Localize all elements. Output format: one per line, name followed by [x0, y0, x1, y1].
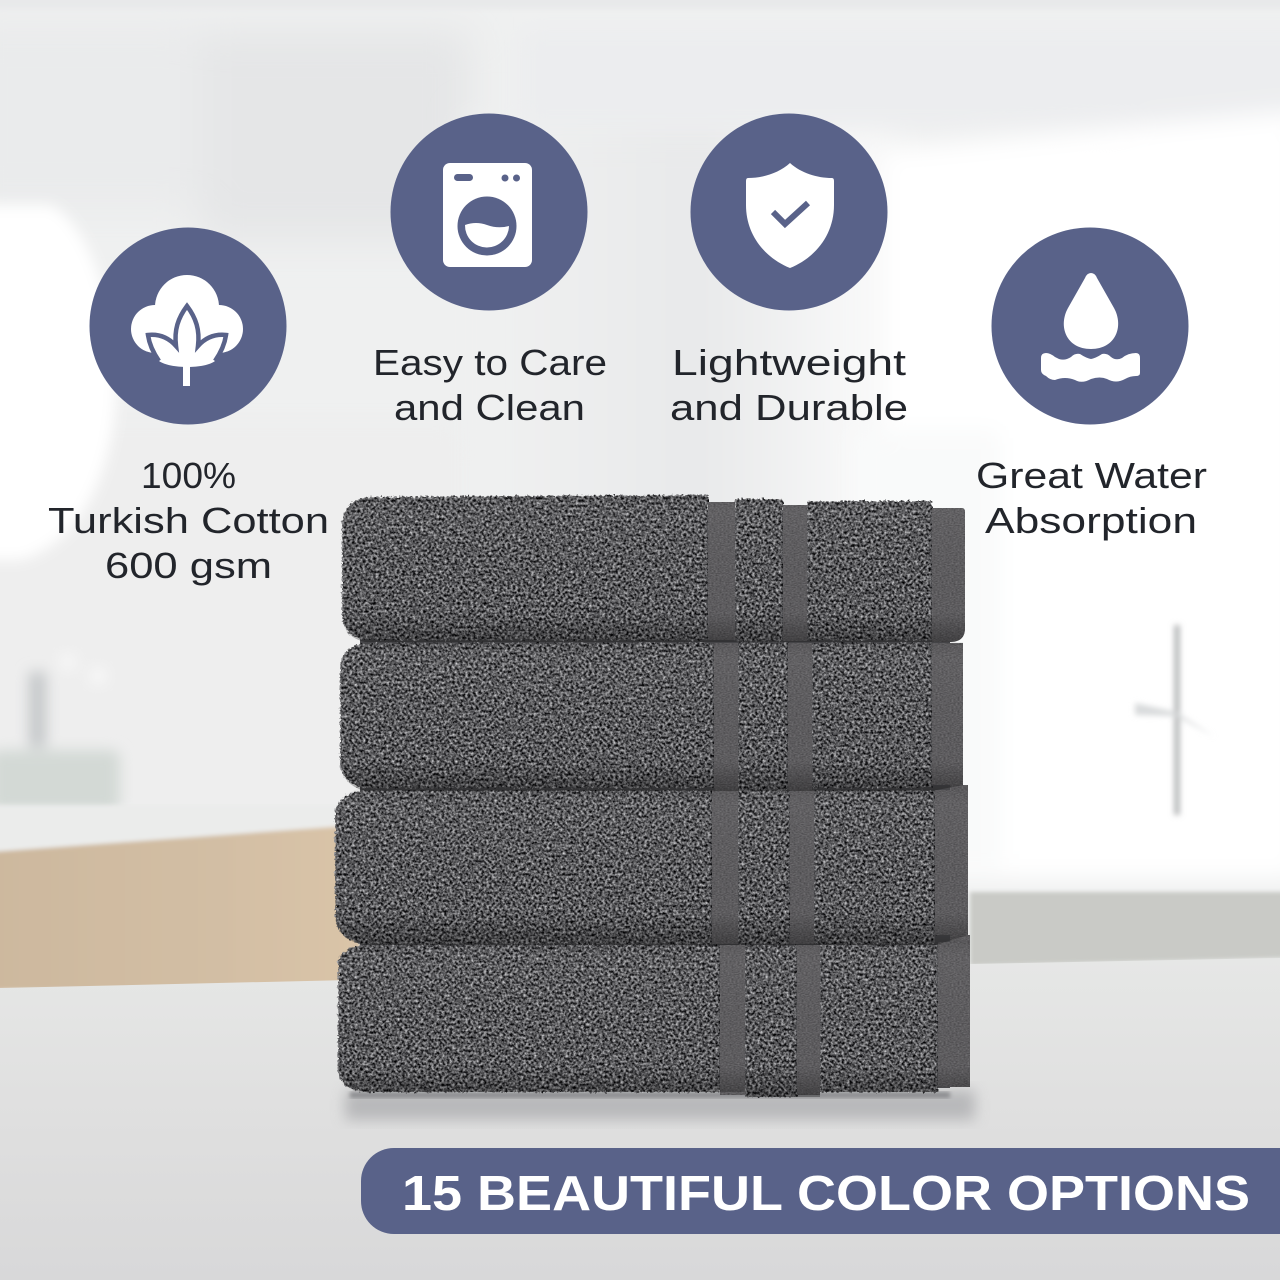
label: 100% Turkish Cotton 600 gsm: Turkish Cotton [48, 500, 329, 541]
banner text: 15 BEAUTIFUL COLOR OPTIONS [402, 1167, 1250, 1221]
label: Easy to Care and Clean: Easy to Care [373, 342, 607, 383]
towel 1 [342, 495, 965, 643]
feature: easy to care [373, 114, 607, 428]
label: Great Water Absorption: Great Water [976, 455, 1207, 496]
label: 100% Turkish Cotton 600 gsm: 100% [141, 455, 236, 496]
towel 4 [338, 935, 970, 1098]
icon: washing machine [390, 114, 588, 310]
banner: color options [361, 1148, 1280, 1234]
label: Easy to Care and Clean [373, 342, 607, 428]
label: Great Water Absorption [976, 455, 1207, 541]
label: Lightweight and Durable: and Durable [670, 387, 908, 428]
label: Great Water Absorption: Absorption [985, 500, 1197, 541]
icon: cotton boll [90, 228, 286, 424]
label: Easy to Care and Clean: and Clean [394, 387, 585, 428]
feature: turkish cotton [48, 228, 329, 586]
towel shadow [345, 1090, 975, 1120]
label: Lightweight and Durable [670, 342, 908, 428]
label: 100% Turkish Cotton 600 gsm [48, 455, 329, 586]
feature: lightweight and durable [670, 114, 908, 428]
feature: water absorption [976, 228, 1207, 541]
towel 2 [340, 638, 963, 791]
towel 3 [335, 785, 968, 945]
counter [0, 805, 360, 852]
table top [0, 958, 1280, 1280]
towel stack [335, 495, 970, 1098]
label: Lightweight and Durable: Lightweight [672, 342, 906, 383]
label: 100% Turkish Cotton 600 gsm: 600 gsm [105, 545, 272, 586]
right wall band [970, 892, 1280, 966]
wood cabinet [0, 815, 360, 990]
icon: shield with check [690, 114, 888, 310]
right faucet [1135, 625, 1215, 815]
icon: water drop over waves [992, 228, 1188, 424]
lamp [0, 205, 116, 560]
